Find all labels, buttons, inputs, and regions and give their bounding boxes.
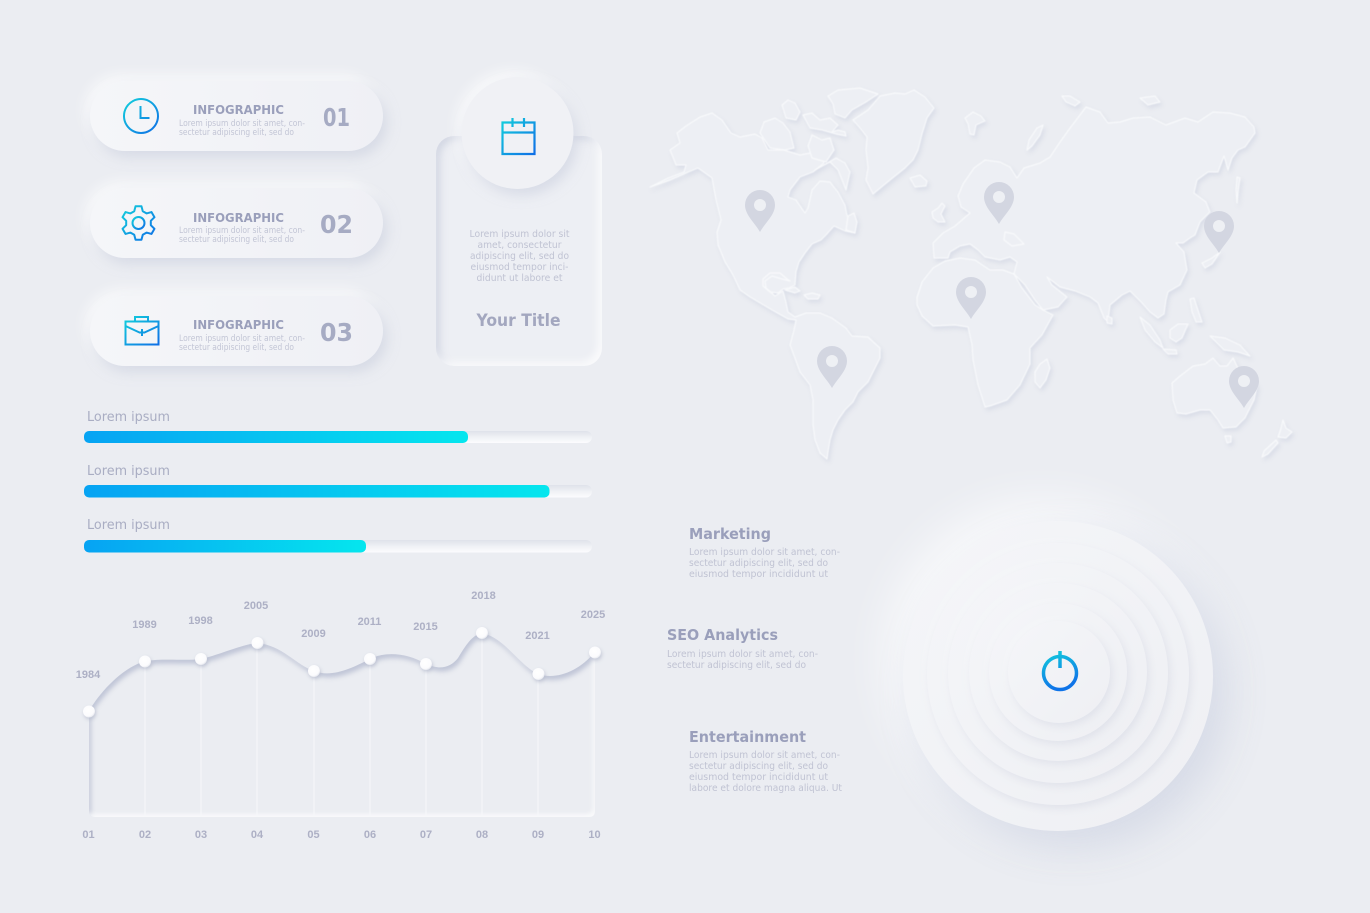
panel: infographic item 02: [90, 188, 383, 258]
chart axis labels: 08: [476, 829, 488, 841]
text block: item 01 description: Lorem ipsum dolor sit amet, con-: [179, 119, 305, 129]
text block: item 02 description: sectetur adipiscing elit, sed do: [179, 235, 294, 245]
heading: infographic 01: INFOGRAPHIC: [193, 102, 284, 117]
text block: entertainment: [689, 728, 842, 794]
text block: marketing: eiusmod tempor incididunt ut: [689, 569, 828, 580]
text block: card description: amet, consectetur: [478, 240, 562, 251]
text block: entertainment: labore et dolore magna aliqua. Ut: [689, 783, 842, 794]
text block: card description: eiusmod tempor inci-: [470, 262, 569, 273]
chart data points: [83, 627, 601, 718]
chart axis labels: 02: [139, 829, 151, 841]
text block: item 03 description: [179, 334, 305, 353]
text block: card description: Lorem ipsum dolor sit: [470, 229, 570, 240]
text block: item 03 description: Lorem ipsum dolor sit amet, con-: [179, 334, 305, 344]
chart axis labels: 09: [532, 829, 544, 841]
map pin: South America: [817, 346, 847, 388]
chart year labels: 2018: [471, 590, 496, 602]
concentric power dial: [903, 521, 1213, 831]
chart axis labels: [82, 829, 601, 841]
chart year labels: 2021: [525, 630, 550, 642]
text block: item 03 description: sectetur adipiscing elit, sed do: [179, 343, 294, 353]
chart year labels: 2011: [358, 616, 381, 628]
circle badge: [462, 77, 574, 189]
chart axis labels: 06: [364, 829, 376, 841]
text block: item 02 description: [179, 226, 305, 245]
text block: item 02 description: Lorem ipsum dolor sit amet, con-: [179, 226, 305, 236]
chart year labels: 2015: [413, 621, 438, 633]
text block: item 01 description: [179, 119, 305, 138]
panel: infographic item 03: [90, 296, 383, 366]
icon: power: [1043, 651, 1076, 690]
chart year labels: 2005: [244, 600, 268, 612]
number 03: 03: [320, 318, 353, 347]
icon: calendar: [502, 118, 534, 154]
map landmasses: [650, 88, 1292, 459]
icon: gear: [123, 206, 154, 240]
text block: seo analytics: Lorem ipsum dolor sit amet, con-: [667, 649, 818, 660]
progress bar 1: Lorem ipsum: [87, 410, 170, 425]
progress bar 1: [84, 410, 592, 443]
text block: marketing: Marketing: [689, 525, 771, 543]
chart year labels: 1984: [76, 669, 101, 681]
text block: item 01 description: sectetur adipiscing elit, sed do: [179, 128, 294, 138]
text block: entertainment: Entertainment: [689, 728, 807, 746]
chart axis labels: 01: [82, 829, 95, 841]
map pin: Africa: [956, 277, 986, 319]
text block: seo analytics: SEO Analytics: [667, 626, 778, 644]
heading: your title: Your Title: [476, 311, 560, 330]
progress bars: [84, 410, 592, 552]
heading: infographic 03: INFOGRAPHIC: [193, 317, 284, 332]
world map: [650, 88, 1292, 459]
text block: entertainment: Lorem ipsum dolor sit amet, con-: [689, 750, 840, 761]
chart year labels: 2009: [301, 628, 326, 640]
chart axis labels: 03: [195, 829, 207, 841]
chart year labels: 2025: [581, 609, 605, 621]
map pin: North America: [745, 190, 775, 232]
chart grid lines: [145, 633, 538, 817]
progress bar 2: [84, 464, 592, 498]
text block: card description: adipiscing elit, sed do: [470, 251, 569, 262]
map pin: Europe: [984, 182, 1014, 224]
number 01: 01: [323, 103, 350, 132]
chart year labels: [76, 590, 605, 681]
heading: infographic 02: INFOGRAPHIC: [193, 210, 284, 225]
icon: briefcase: [126, 317, 158, 344]
text block: seo analytics: sectetur adipiscing elit, sed do: [667, 660, 806, 671]
panel: your title card: [436, 77, 602, 366]
text block: marketing: [689, 525, 840, 580]
progress bar 3: Lorem ipsum: [87, 518, 170, 533]
text block: card description: didunt ut labore et: [476, 273, 563, 284]
chart axis labels: 10: [588, 829, 601, 841]
line chart: [76, 590, 605, 841]
progress bar 3: [84, 518, 592, 552]
text block: marketing: sectetur adipiscing elit, sed do: [689, 558, 828, 569]
number 02: 02: [320, 210, 353, 239]
map pin: Australia: [1229, 366, 1259, 408]
map pin: East Asia: [1204, 211, 1234, 253]
chart year labels: 1989: [132, 619, 157, 631]
text block: seo analytics: [667, 626, 818, 671]
dial rings: [903, 521, 1213, 831]
chart axis labels: 05: [307, 829, 320, 841]
progress bar 2: Lorem ipsum: [87, 464, 170, 479]
chart area: [89, 633, 595, 817]
text block: card description: [470, 229, 570, 284]
chart axis labels: 04: [251, 829, 264, 841]
icon: clock: [124, 99, 158, 133]
chart axis labels: 07: [420, 829, 432, 841]
text block: entertainment: sectetur adipiscing elit, sed do: [689, 761, 828, 772]
panel: infographic item 01: [90, 81, 383, 151]
text block: entertainment: eiusmod tempor incididunt ut: [689, 772, 828, 783]
chart year labels: 1998: [188, 615, 213, 627]
text block: marketing: Lorem ipsum dolor sit amet, con-: [689, 547, 840, 558]
